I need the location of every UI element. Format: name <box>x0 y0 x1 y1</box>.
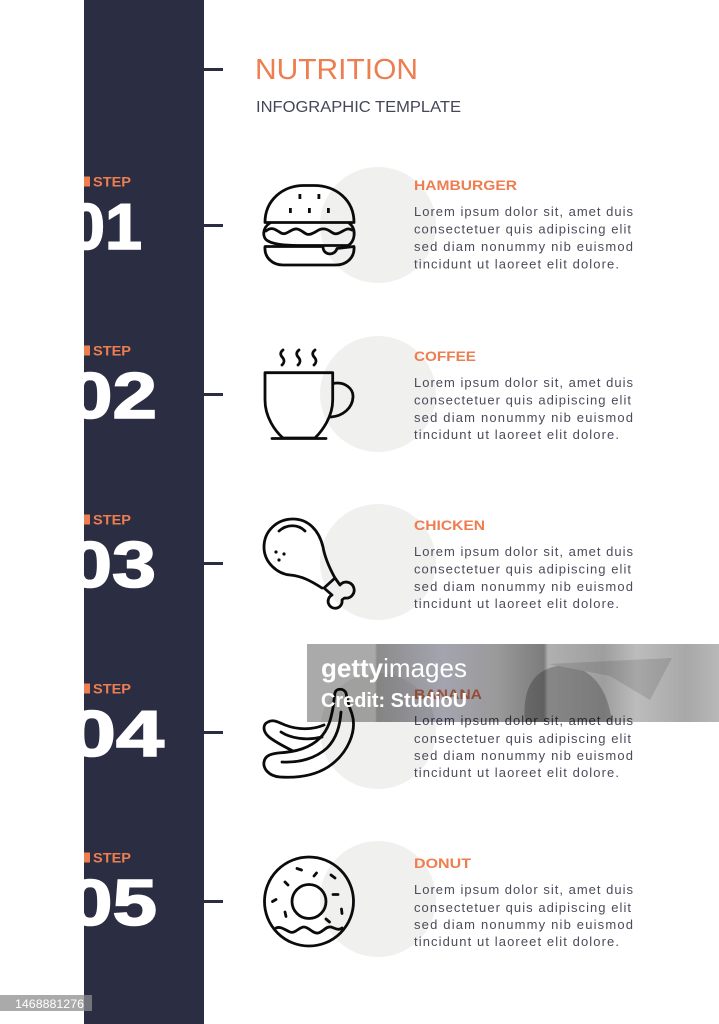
icon: chicken leg <box>264 519 354 608</box>
tag background <box>0 995 92 1011</box>
body text: tincidunt ut laoreet elit dolore. <box>414 427 619 442</box>
icon: hamburger <box>264 186 354 265</box>
body text: consectetuer quis adipiscing elit <box>414 392 631 408</box>
body text: Lorem ipsum dolor sit, amet duis <box>414 544 634 559</box>
step label: STEP <box>93 344 131 358</box>
heading: COFFEE <box>414 348 476 364</box>
body text: sed diam nonummy nib euismod <box>414 748 633 763</box>
body text <box>414 204 634 272</box>
body text: sed diam nonummy nib euismod <box>414 410 633 425</box>
connector tick <box>204 393 223 396</box>
body text: Lorem ipsum dolor sit, amet duis <box>414 204 634 219</box>
image id tag <box>0 995 92 1011</box>
subtitle: INFOGRAPHIC TEMPLATE <box>256 99 461 116</box>
tag number: 1468881276 <box>15 997 84 1011</box>
body text: sed diam nonummy nib euismod <box>414 579 633 594</box>
step 5: donut <box>68 841 634 957</box>
step label: STEP <box>93 850 131 866</box>
watermark credit: Credit: StudioU <box>321 690 467 712</box>
step number: 05 <box>68 866 157 939</box>
body text: tincidunt ut laoreet elit dolore. <box>414 256 619 272</box>
background circle <box>320 336 436 452</box>
watermark logo: gettyimages <box>321 653 467 683</box>
background circle <box>320 504 436 620</box>
body text <box>414 713 634 780</box>
watermark background <box>307 644 719 722</box>
watermark shapes <box>524 658 672 722</box>
heading: BANANA <box>414 686 482 702</box>
body text: consectetuer quis adipiscing elit <box>414 731 631 746</box>
step 3: chicken <box>68 504 634 620</box>
step 4: banana <box>68 673 634 789</box>
step number: 04 <box>68 697 164 770</box>
body text: sed diam nonummy nib euismod <box>414 917 633 932</box>
title: NUTRITION <box>255 54 418 86</box>
step number: 01 <box>68 190 142 263</box>
body text: tincidunt ut laoreet elit dolore. <box>414 765 619 780</box>
body text <box>414 882 634 949</box>
background circle <box>320 841 436 957</box>
background circle <box>320 167 436 283</box>
dark timeline sidebar <box>84 0 204 1024</box>
body text: consectetuer quis adipiscing elit <box>414 562 631 576</box>
body text: consectetuer quis adipiscing elit <box>414 222 631 236</box>
body text <box>414 544 634 611</box>
body text: tincidunt ut laoreet elit dolore. <box>414 596 619 611</box>
heading: CHICKEN <box>414 517 485 533</box>
heading: HAMBURGER <box>414 177 517 193</box>
step 1: hamburger <box>68 167 634 283</box>
body text: sed diam nonummy nib euismod <box>414 239 633 254</box>
sesame seeds <box>289 194 330 213</box>
body text: Lorem ipsum dolor sit, amet duis <box>414 375 634 390</box>
icon: coffee cup <box>265 350 353 438</box>
body text: tincidunt ut laoreet elit dolore. <box>414 934 619 949</box>
step label: STEP <box>93 512 131 528</box>
connector tick <box>204 900 223 903</box>
skin dots <box>274 550 286 562</box>
step label: STEP <box>93 174 131 190</box>
heading: DONUT <box>414 855 472 871</box>
body text: Lorem ipsum dolor sit, amet duis <box>414 713 634 728</box>
icon: bananas <box>264 689 353 777</box>
connector tick <box>204 562 223 565</box>
watermark band <box>307 644 719 722</box>
body text <box>414 375 634 442</box>
icon: donut <box>264 857 354 946</box>
connector tick <box>204 731 223 734</box>
step label: STEP <box>93 682 131 696</box>
background circle <box>320 673 436 789</box>
connector tick <box>204 224 223 227</box>
title connector tick <box>204 68 223 71</box>
step 2: coffee <box>68 336 634 452</box>
step number: 03 <box>68 528 156 601</box>
step number: 02 <box>68 359 157 432</box>
body text: consectetuer quis adipiscing elit <box>414 900 631 915</box>
body text: Lorem ipsum dolor sit, amet duis <box>414 882 634 897</box>
